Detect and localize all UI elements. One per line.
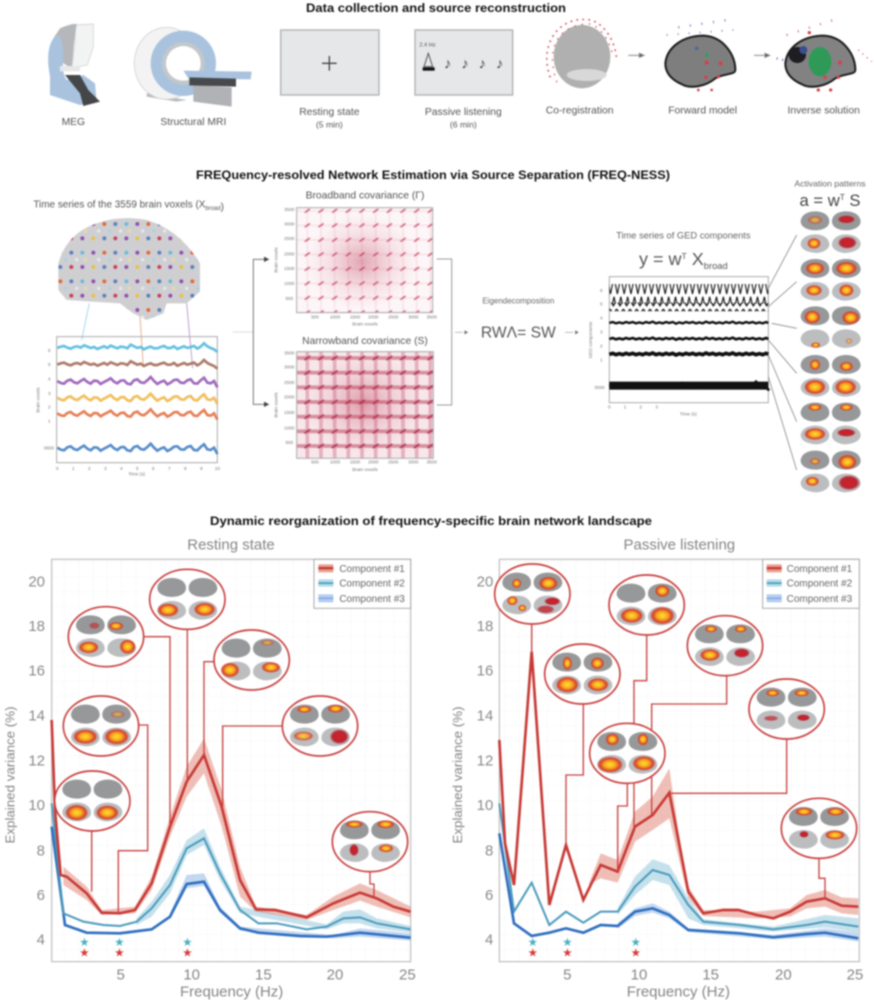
leader lines to brain maps [92,628,374,913]
chart: voxel time series: 3 [48,391,51,396]
chart: narrowband covariance matrix: 1500 [350,459,361,464]
section title: FREQ-NESS: FREQuency-resolved Network Estimation via Source Separation (FREQ-NESS) [196,170,670,182]
label: structural MRI: Structural MRI [160,117,226,128]
component 1 band [588,768,858,918]
chart: narrowband covariance matrix: 2000 [368,459,379,464]
chart: GED component time series: 3 [655,405,658,410]
component 3 curve [52,827,411,938]
chart: GED component time series: 4 [600,315,603,320]
chart: narrowband covariance matrix: Brain voxels [352,467,378,472]
chart: narrowband covariance matrix: 1500 [284,410,295,415]
icon: passive listening screen [415,30,513,95]
chart: broadband covariance matrix [273,207,437,327]
y axis tick labels: 12 [477,752,493,769]
callout: brain map 5 Hz [63,696,139,756]
equation: y = w^T X broad: broad [704,261,728,271]
chart: voxel time series: 6 [152,466,155,471]
chart: voxel time series: 6 [48,348,51,353]
significance stars: ★ [528,948,538,960]
equation: y = w^T X broad: T [681,251,687,261]
chart: broadband covariance matrix: Brain voxels [273,247,278,273]
component 1 curve [499,652,858,918]
y axis tick labels: 8 [37,842,45,859]
label: resting state: (5 min) [316,119,343,129]
icon: forward model brain [665,20,735,91]
heading: broadband covariance: Broadband covariance (Γ) [306,191,424,202]
significance stars: ★ [182,937,192,949]
y axis tick labels: 16 [477,663,493,680]
significance stars: ★ [631,937,641,949]
heading: resting state: Resting state [187,536,275,553]
significance stars: ★ [182,948,192,960]
chart: GED component time series: 5 [600,301,603,306]
chart: narrowband covariance matrix [273,350,437,472]
chart: narrowband covariance matrix: 500 [285,440,294,445]
component 2 curve [52,803,411,929]
heading: time series of brain voxels: ) [221,202,224,213]
y axis tick labels: 14 [477,708,493,725]
chart: GED component time series: 3 [600,330,603,335]
component 1 band [63,738,411,920]
chart: narrowband covariance matrix: 1000 [284,425,295,430]
y axis tick labels: 6 [485,887,493,904]
chart: narrowband covariance matrix: 3500 [426,459,437,464]
icon: structural MRI scanner [134,27,252,107]
component 3 band [170,873,411,941]
chart: broadband covariance matrix: 500 [311,314,319,319]
component 2 band [137,828,411,933]
chart: GED component time series: GED components [588,321,593,358]
y axis tick labels [477,573,493,949]
chart: broadband covariance matrix: 1500 [350,314,361,319]
chart: voxel time series: 1 [72,466,75,471]
legend: Component #3 [339,594,405,605]
legend [763,559,859,608]
heading: time series of brain voxels: Time series of the 3559 brain voxels (X [33,199,206,210]
y axis tick labels [28,573,45,949]
icon: resting state screen [281,30,379,95]
panel: eigendecomposition and components [437,179,866,492]
x axis tick labels [116,966,416,983]
label: forward model: Forward model [668,105,737,116]
chart: narrowband covariance matrix: 2500 [388,459,399,464]
chart: voxel time series: 7 [168,466,171,471]
equation: a = w^T S: T [840,193,845,202]
arrow: bracket to equation [455,331,468,334]
component 3 curve [499,833,858,938]
chart: narrowband covariance matrix: 1000 [330,459,341,464]
chart: voxel time series: 3 [104,466,107,471]
chart: narrowband covariance matrix: 3500 [284,350,295,355]
y axis tick labels: 8 [485,842,493,859]
heading: narrowband covariance: Narrowband covariance (S) [302,336,428,347]
icon: passive listening screen: ♪ [444,56,451,72]
x axis tick labels: 10 [183,966,200,983]
chart: broadband covariance matrix: 2500 [388,314,399,319]
chart: broadband covariance matrix: 500 [285,296,294,301]
callout: brain map 12.2 Hz [749,679,824,739]
chart: GED component time series: 2 [600,344,603,349]
chart: voxel time series: 9 [200,466,203,471]
callout: brain map 8.5 Hz [590,723,665,783]
label: eigendecomposition: Eigendecomposition [482,296,554,305]
chart: narrowband covariance matrix: 3000 [284,365,295,370]
section title: data collection: Data collection and source reconstruction [306,3,566,15]
icon: MEG scanner [48,24,100,106]
chart: voxel time series: 4 [120,466,123,471]
label: passive listening: (6 min) [450,119,477,129]
significance stars: ★ [114,937,124,949]
arrow: to forward model [628,53,644,57]
callout: brain map 9.7 Hz [150,569,225,629]
panel: passive listening plot [450,536,863,1000]
y axis tick labels: 20 [477,573,493,590]
callout: brain map 10.9 Hz [687,616,763,676]
plot frame and grid [499,559,859,962]
brain voxel map [58,218,200,320]
y axis tick labels: 16 [28,663,45,680]
chart: broadband covariance matrix: Brain voxels [352,322,378,327]
callout: brain map 8.5 Hz [68,607,144,667]
y axis tick labels: 6 [37,887,45,904]
callout: brain map 10.9 Hz [214,630,289,690]
chart: voxel time series: 5 [136,466,139,471]
chart: voxel time series: 10 [215,466,220,471]
chart: narrowband covariance matrix: 2500 [284,380,295,385]
chart: GED component time series: 3559 [594,385,605,390]
equation: RWΛ = SW: RWΛ= SW [481,324,556,341]
x axis tick labels [563,966,863,983]
label: MEG: MEG [62,117,85,128]
equation: a = w^T S: S [845,191,860,210]
chart: GED component time series: Time (s) [680,411,697,416]
chart: broadband covariance matrix: 1000 [284,281,295,286]
chart: broadband covariance matrix: 3000 [284,222,295,227]
chart: voxel time series: 0 [56,466,59,471]
icon: passive listening screen: ♪ [496,56,503,72]
significance stars: ★ [114,948,124,960]
chart: voxel time series: 2 [48,404,51,409]
heading: time series of GED components: Time series of GED components [616,231,751,241]
chart: narrowband covariance matrix: Brain voxels [273,392,278,418]
x axis tick labels: 20 [327,966,343,983]
label: resting state: Resting state [299,107,359,118]
y axis tick labels: 20 [28,573,45,590]
chart: broadband covariance matrix: 2500 [284,236,295,241]
x axis tick labels: 15 [702,966,719,983]
x axis tick labels: 5 [563,966,572,983]
y axis tick labels: 4 [485,932,493,949]
bracket: covariance to eigendecomposition [437,259,452,405]
y axis tick labels: 10 [28,797,45,814]
icon: passive listening screen: 2.4 Hz [419,43,436,49]
leader lines to brain maps [532,624,825,898]
chart: voxel time series: 2 [88,466,91,471]
chart: GED component time series: 2 [639,405,642,410]
label: co-registration: Co-registration [546,105,614,116]
panel: voxel time series and covariance [33,191,437,477]
equation: y = w^T X broad: X [687,249,704,269]
chart: voxel time series: Brain voxels [35,387,40,413]
y axis tick labels: 4 [37,932,45,949]
significance stars [528,937,641,960]
significance stars: ★ [631,948,641,960]
label: passive listening: Passive listening [425,107,502,118]
chart: GED component time series [588,277,769,416]
legend [314,559,411,608]
callout: brain map 2.5 Hz [495,564,570,624]
chart: broadband covariance matrix: 2000 [284,252,295,257]
y axis tick labels: 12 [28,752,45,769]
x axis tick labels: 5 [116,966,125,983]
significance stars [79,937,192,960]
chart: narrowband covariance matrix: 2000 [284,395,295,400]
callout: brain map 23 Hz [781,798,857,858]
callout: brain map 9.5 Hz [609,575,684,635]
x axis tick labels: 20 [775,966,792,983]
component 1 curve [52,720,411,917]
arrow: equation to components [565,331,578,334]
chart: broadband covariance matrix: 3500 [426,314,437,319]
callout: brain map 12.2 Hz [282,696,358,756]
label: inverse solution: Inverse solution [787,105,860,116]
callout: brain map 5 Hz [545,644,620,704]
chart: voxel time series: 1 [48,418,51,423]
arrow: split to covariance matrices [232,257,269,407]
significance stars: ★ [79,937,89,949]
chart: broadband covariance matrix: 1500 [284,266,295,271]
legend: Component #1 [339,564,405,575]
chart: narrowband covariance matrix: 500 [311,459,319,464]
x axis tick labels: 25 [847,966,863,983]
chart: narrowband covariance matrix: 3000 [408,459,419,464]
component 2 curve [499,803,858,929]
chart: voxel time series: 5 [48,362,51,367]
chart: GED component time series: 6 [600,288,603,293]
chart: voxel time series: Time (s) [128,472,146,477]
brain maps: activation patterns [801,211,861,492]
chart: voxel time series: 3559 [43,445,54,450]
arrows: components to activation patterns [768,235,797,470]
chart: broadband covariance matrix: 3000 [408,314,419,319]
significance stars: ★ [528,937,538,949]
arrow: to inverse solution [754,53,770,57]
significance stars: ★ [562,937,572,949]
legend: Component #3 [787,594,853,605]
chart: voxel time series: 4 [48,377,51,382]
legend: Component #1 [787,564,853,575]
chart: broadband covariance matrix: 1000 [330,314,341,319]
heading: passive listening: Passive listening [624,536,735,553]
panel: data collection and source reconstruction [48,19,872,129]
chart: broadband covariance matrix: 3500 [284,207,295,212]
section title: dynamic reorganization: Dynamic reorganization of frequency-specific brain network landscape [210,516,652,528]
legend: Component #2 [339,579,405,590]
y axis tick labels: 14 [28,708,45,725]
y axis label: Explained variance (%) [3,706,18,844]
component 3 band [618,903,858,942]
y axis tick labels: 10 [477,797,493,814]
chart: broadband covariance matrix: 2000 [368,314,379,319]
heading: time series of brain voxels: broad [205,206,221,212]
callout: brain map 22 Hz [332,812,408,872]
icon: co-registration head [547,19,617,88]
y axis tick labels: 18 [477,618,493,635]
equation: a = w^T S: a = w [800,191,840,210]
heading: activation patterns: Activation patterns [794,179,866,189]
equation: y = w^T X broad: y = w [639,249,681,269]
chart: voxel time series [35,337,220,477]
x axis tick labels: 15 [255,966,272,983]
callout: brain map 2.5 Hz [55,771,130,831]
voxel connector lines [82,303,193,368]
icon: passive listening screen: ♪ [461,56,469,72]
y axis label: Explained variance (%) [450,706,465,844]
chart: GED component time series: 0 [608,405,611,410]
panel: resting state plot [3,536,416,1000]
chart: voxel time series: 8 [184,466,187,471]
legend: Component #2 [787,579,853,590]
x axis tick labels: 10 [631,966,647,983]
chart: GED component time series: 1 [624,405,627,410]
chart: GED component time series: 1 [600,358,603,363]
icon: inverse solution brain [777,20,872,92]
y axis tick labels: 18 [28,618,45,635]
significance stars: ★ [562,948,572,960]
plot frame and grid [52,559,411,962]
significance stars: ★ [79,948,89,960]
icon: passive listening screen: ♪ [479,56,486,72]
x axis tick labels: 25 [399,966,416,983]
component 2 band [618,859,858,933]
